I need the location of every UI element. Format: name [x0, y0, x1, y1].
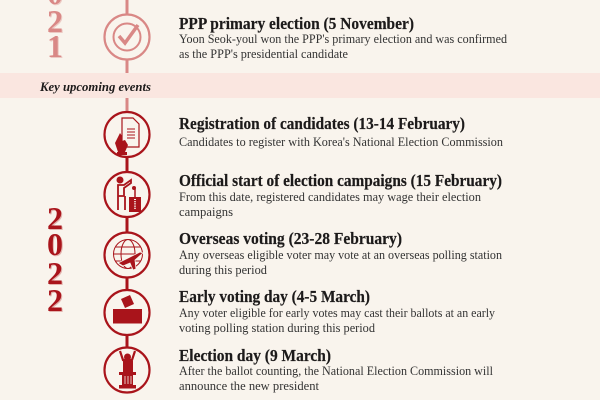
event: election day	[179, 346, 493, 393]
event: election day: Election day (9 March)	[179, 346, 331, 365]
event: registration of candidates: Registration of candidates (13-14 February)	[179, 114, 465, 133]
year 2021	[47, 0, 64, 65]
year 2022: 2	[48, 283, 64, 319]
year 2021: 1	[48, 29, 64, 65]
icon: speaker at podium	[104, 172, 150, 217]
key upcoming events band: Key upcoming events	[39, 80, 151, 94]
event: PPP primary election: as the PPP's presidential candidate	[179, 47, 348, 61]
icon: globe with plane	[104, 232, 150, 278]
icon: winner at podium	[104, 348, 150, 392]
year 2021: 2	[47, 3, 63, 39]
event: overseas voting: Any overseas eligible voter may vote at an overseas polling station	[179, 248, 503, 262]
event: early voting day: Any voter eligible for early votes may cast their ballots at an early	[179, 306, 496, 320]
event: PPP primary election: Yoon Seok-youl won the PPP's primary election and was confirmed	[179, 32, 508, 46]
event: PPP primary election: PPP primary election (5 November)	[179, 14, 414, 33]
year 2021: 1	[47, 28, 63, 64]
year 2022: 2	[47, 282, 63, 318]
year 2022: 2	[48, 256, 64, 292]
year 2021: 2	[48, 4, 64, 40]
event: early voting day	[179, 287, 496, 335]
event: PPP primary election	[179, 14, 508, 61]
key upcoming events band	[0, 73, 600, 98]
icon: check mark	[104, 14, 150, 60]
year 2022	[47, 200, 64, 319]
year 2022: 2	[48, 201, 64, 237]
event: official start of campaigns: Official start of election campaigns (15 February)	[179, 171, 502, 190]
dark timeline line	[126, 112, 128, 392]
event: official start of campaigns	[179, 171, 502, 219]
event: official start of campaigns: From this date, registered candidates may wage their election	[179, 190, 482, 204]
icon: document in hand	[104, 112, 150, 157]
event: early voting day: Early voting day (4-5 March)	[179, 287, 370, 306]
event: early voting day: voting polling station during this period	[179, 321, 376, 335]
icon: ballot box	[104, 290, 150, 335]
event: election day: After the ballot counting, the National Election Commission will	[179, 364, 493, 378]
year 2022: 2	[47, 200, 63, 236]
year 2022: 0	[48, 227, 64, 263]
event: official start of campaigns: campaigns	[179, 205, 233, 219]
year 2022: 0	[47, 226, 63, 262]
event: election day: announce the new president	[179, 379, 320, 393]
event: registration of candidates: Candidates to register with Korea's National Election Commission	[179, 135, 504, 149]
year 2022: 2	[47, 255, 63, 291]
event: registration of candidates	[179, 114, 504, 149]
event: overseas voting: during this period	[179, 263, 268, 277]
event: overseas voting	[179, 229, 503, 277]
pale timeline line	[126, 0, 128, 112]
event: overseas voting: Overseas voting (23-28 February)	[179, 229, 402, 248]
